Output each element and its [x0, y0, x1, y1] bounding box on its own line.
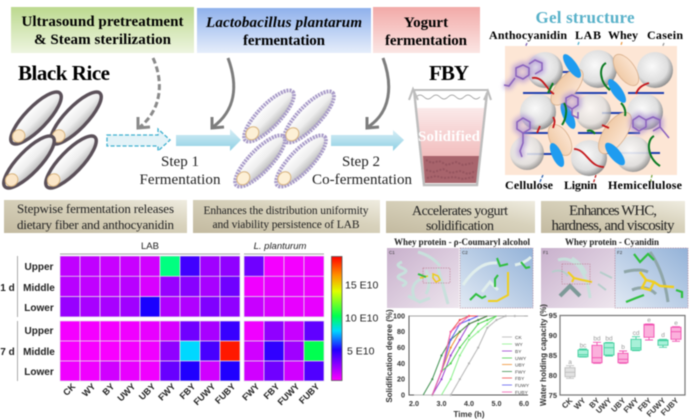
- legend: WY: [515, 342, 524, 348]
- text: step 1 fermentation: [140, 154, 221, 188]
- text: step 2 co-fermentation: Co-fermentation: [312, 172, 412, 188]
- row labels: Middle: [23, 283, 55, 294]
- arrow: plantarum curve: [212, 58, 234, 128]
- chart: water holding capacity box plot: [539, 304, 685, 419]
- docking panel F2: [615, 248, 688, 308]
- whey ellipses: [543, 50, 644, 159]
- colour bar: 10 E10: [345, 312, 378, 324]
- significance letters: bc: [580, 342, 587, 350]
- banner: distribution uniformity: [193, 200, 380, 233]
- significance letters: bd: [605, 336, 613, 342]
- legend: FUBY: [515, 390, 529, 396]
- header: yogurt fermentation: fermentation: [385, 33, 468, 49]
- column labels: [61, 381, 321, 407]
- column labels: FUBY: [297, 381, 321, 406]
- text: step 1 fermentation: Fermentation: [140, 172, 221, 188]
- labels: bottom component names: Lignin: [564, 178, 597, 192]
- header: ultrasound pretreatment: Ultrasound pretreatment: [22, 14, 184, 30]
- docking panel C1: C1: [389, 250, 395, 255]
- banner: stepwise fermentation: Stepwise fermentation releases: [17, 201, 174, 216]
- header: Lactobacillus plantarum fermentation: [197, 8, 371, 53]
- axis labels: 100: [393, 312, 405, 320]
- labels: bottom component names: Cellulose: [505, 178, 554, 192]
- group headers: L. planturum: [254, 241, 306, 252]
- banner: enhances WHC: hardness, and viscosity: [552, 218, 675, 234]
- chart: water holding capacity box plot: BY: [587, 395, 602, 410]
- column labels: UWY: [115, 381, 137, 403]
- banner: accelerates solidification: solidification: [426, 219, 494, 234]
- labels: top component names: [489, 28, 683, 42]
- column labels: BY: [100, 381, 116, 397]
- panel: gel structure: [489, 8, 683, 192]
- arrow: dashed pretreatment curve: [138, 58, 159, 128]
- chart: water holding capacity box plot: CK: [560, 396, 575, 410]
- label: solidified: Solidified: [418, 129, 481, 145]
- axis labels: 60: [397, 343, 405, 352]
- chart: solidification degree line chart: 2.0: [409, 399, 419, 408]
- labels: bottom component names: [505, 178, 683, 192]
- cells: [60, 256, 324, 381]
- legend: UBY: [515, 362, 526, 368]
- row labels: Upper: [25, 262, 54, 273]
- row labels: 7 d: [0, 347, 15, 358]
- header: yogurt fermentation: [373, 7, 480, 53]
- heading: Black Rice: Black Rice: [18, 61, 110, 85]
- significance letters: b: [621, 344, 625, 351]
- chart: solidification degree line chart: 3.0: [436, 399, 446, 408]
- chart: LAB heatmap: [0, 241, 378, 407]
- axis labels: 40: [397, 359, 405, 368]
- chart: water holding capacity box plot: UWY: [594, 395, 614, 415]
- lignin strands: [532, 78, 649, 167]
- labels: top component names: Casein: [647, 28, 683, 42]
- chart: solidification degree line chart: [385, 309, 530, 419]
- column labels: FUWY: [192, 381, 217, 407]
- banner: distribution uniformity: Enhances the distribution uniformity: [204, 205, 369, 217]
- column labels: FBY: [178, 381, 197, 401]
- arrow: yogurt curve: [367, 58, 389, 128]
- banner: enhances WHC: [541, 201, 685, 234]
- arrow: step 1 dashed: [107, 129, 170, 151]
- heading: whey protein coumaryl alcohol: Whey protein - ρ-Coumaryl alcohol: [394, 237, 530, 247]
- column labels: CK: [61, 381, 78, 398]
- axis labels: 95: [549, 311, 557, 320]
- cellulose fibers: [522, 72, 664, 154]
- LAB rods: [547, 52, 629, 169]
- legend: FWY: [515, 370, 526, 376]
- chart: water holding capacity box plot: FBY: [636, 395, 654, 413]
- header: Lactobacillus plantarum fermentation: fermentation: [243, 33, 326, 49]
- column labels: UBY: [137, 381, 157, 402]
- casein spheres: [510, 50, 673, 176]
- labels: bottom component names: Hemicellulose: [608, 178, 683, 192]
- data series: [414, 316, 524, 395]
- axis labels: 75: [549, 391, 557, 400]
- axis labels: [393, 312, 405, 400]
- chart: water holding capacity box plot: FWY: [622, 395, 641, 415]
- colour bar: 15 E10: [345, 280, 378, 292]
- axes: [409, 316, 528, 395]
- significance letters: cd: [633, 330, 640, 337]
- docking panel C2: [460, 248, 533, 308]
- row labels: Lower: [24, 303, 54, 314]
- hemicellulose strands: [548, 63, 660, 166]
- legend: CK: [515, 335, 522, 341]
- row labels: Upper: [25, 326, 54, 337]
- chart: solidification degree line chart: 5.0: [492, 399, 502, 408]
- axis labels: 80: [549, 371, 557, 380]
- anthocyanidin molecules: [504, 60, 669, 157]
- column labels: FBY: [262, 381, 281, 401]
- chart: solidification degree line chart: Time (h): [454, 410, 485, 419]
- axis labels: 80: [397, 327, 405, 336]
- header: yogurt fermentation: Yogurt: [404, 15, 448, 31]
- heading: whey protein cyanidin: Whey protein - Cyanidin: [565, 237, 659, 247]
- labels: top component names: LAB: [575, 28, 601, 42]
- labels: top component names: Anthocyanidin: [489, 28, 567, 42]
- text: step 2 co-fermentation: [312, 154, 412, 188]
- docking panel F1: F1: [543, 250, 549, 255]
- plot frame: [560, 316, 685, 395]
- row labels: [0, 262, 55, 378]
- significance letters: [568, 317, 678, 366]
- chart: water holding capacity box plot: Water holding capacity (%): [539, 304, 548, 406]
- text: step 2 co-fermentation: Step 2: [342, 154, 380, 170]
- banner: enhances WHC: Enhances WHC,: [569, 203, 657, 219]
- row labels: 1 d: [0, 283, 15, 294]
- boxes: [565, 324, 681, 378]
- gel background: [505, 46, 677, 175]
- axis labels: 0: [401, 390, 405, 400]
- labels: top component names: Whey: [608, 28, 638, 42]
- arrow: step 2 solid: [331, 130, 404, 151]
- chart: water holding capacity box plot: WY: [572, 395, 588, 411]
- row labels: Lower: [24, 367, 54, 378]
- group headers: [60, 241, 324, 254]
- icon: yogurt cup: [409, 89, 491, 185]
- banner: distribution uniformity: and viability persistence of LAB: [212, 219, 360, 231]
- column labels: FUWY: [276, 381, 301, 407]
- docking panel C2: C2: [462, 250, 468, 255]
- chart: solidification degree line chart: 6.0: [519, 399, 529, 408]
- legend: FUWY: [515, 383, 530, 389]
- significance letters: a: [568, 359, 572, 366]
- column labels: WY: [80, 381, 97, 399]
- axis labels: 20: [397, 374, 405, 384]
- legend: FBY: [515, 376, 525, 382]
- docking panel C1: [387, 248, 459, 308]
- legend: BY: [515, 349, 522, 355]
- icon: black rice grains: [0, 86, 108, 194]
- banner: accelerates solidification: Accelerates yogurt: [412, 204, 508, 219]
- chart: solidification degree line chart: 4.0: [464, 399, 474, 408]
- colour bar: 5 E10: [347, 346, 375, 358]
- header: Lactobacillus plantarum fermentation: Lactobacillus plantarum: [205, 15, 362, 31]
- group headers: LAB: [141, 241, 159, 252]
- axis labels: [549, 311, 557, 400]
- banner: stepwise fermentation: [4, 200, 187, 233]
- axis labels: 90: [549, 331, 557, 340]
- docking panel F1: [541, 248, 615, 308]
- colour bar: [332, 256, 378, 380]
- banner: accelerates solidification: [386, 201, 535, 234]
- legend: [502, 335, 530, 396]
- significance letters: e: [647, 317, 651, 324]
- text: step 1 fermentation: Step 1: [161, 154, 199, 170]
- chart: solidification degree line chart: Solidification degree (%): [385, 309, 394, 403]
- column labels: FWY: [156, 381, 177, 403]
- column labels: FUBY: [213, 381, 237, 406]
- heading: gel structure: Gel structure: [536, 8, 635, 27]
- heading: FBY: FBY: [429, 61, 469, 85]
- legend: UWY: [515, 356, 527, 362]
- chart: water holding capacity box plot: UBY: [609, 395, 628, 414]
- leader lines: [520, 42, 664, 184]
- axis labels: 85: [549, 351, 557, 360]
- significance letters: bd: [593, 336, 601, 342]
- header: ultrasound pretreatment: [11, 7, 194, 53]
- icon: fermented rice grains: [228, 84, 341, 193]
- column labels: FWY: [240, 381, 261, 403]
- chart: water holding capacity box plot: FUWY: [645, 395, 668, 419]
- docking panel F2: F2: [617, 250, 623, 255]
- row labels: Middle: [23, 347, 55, 358]
- significance letters: e: [674, 320, 678, 327]
- chart: water holding capacity box plot: FUBY: [659, 395, 681, 417]
- banner: stepwise fermentation: dietary fiber and anthocyanidin: [17, 217, 174, 232]
- header: ultrasound pretreatment: & Steam sterilization: [34, 32, 172, 48]
- arrow: step 1 solid: [176, 129, 241, 151]
- significance letters: d: [661, 332, 665, 339]
